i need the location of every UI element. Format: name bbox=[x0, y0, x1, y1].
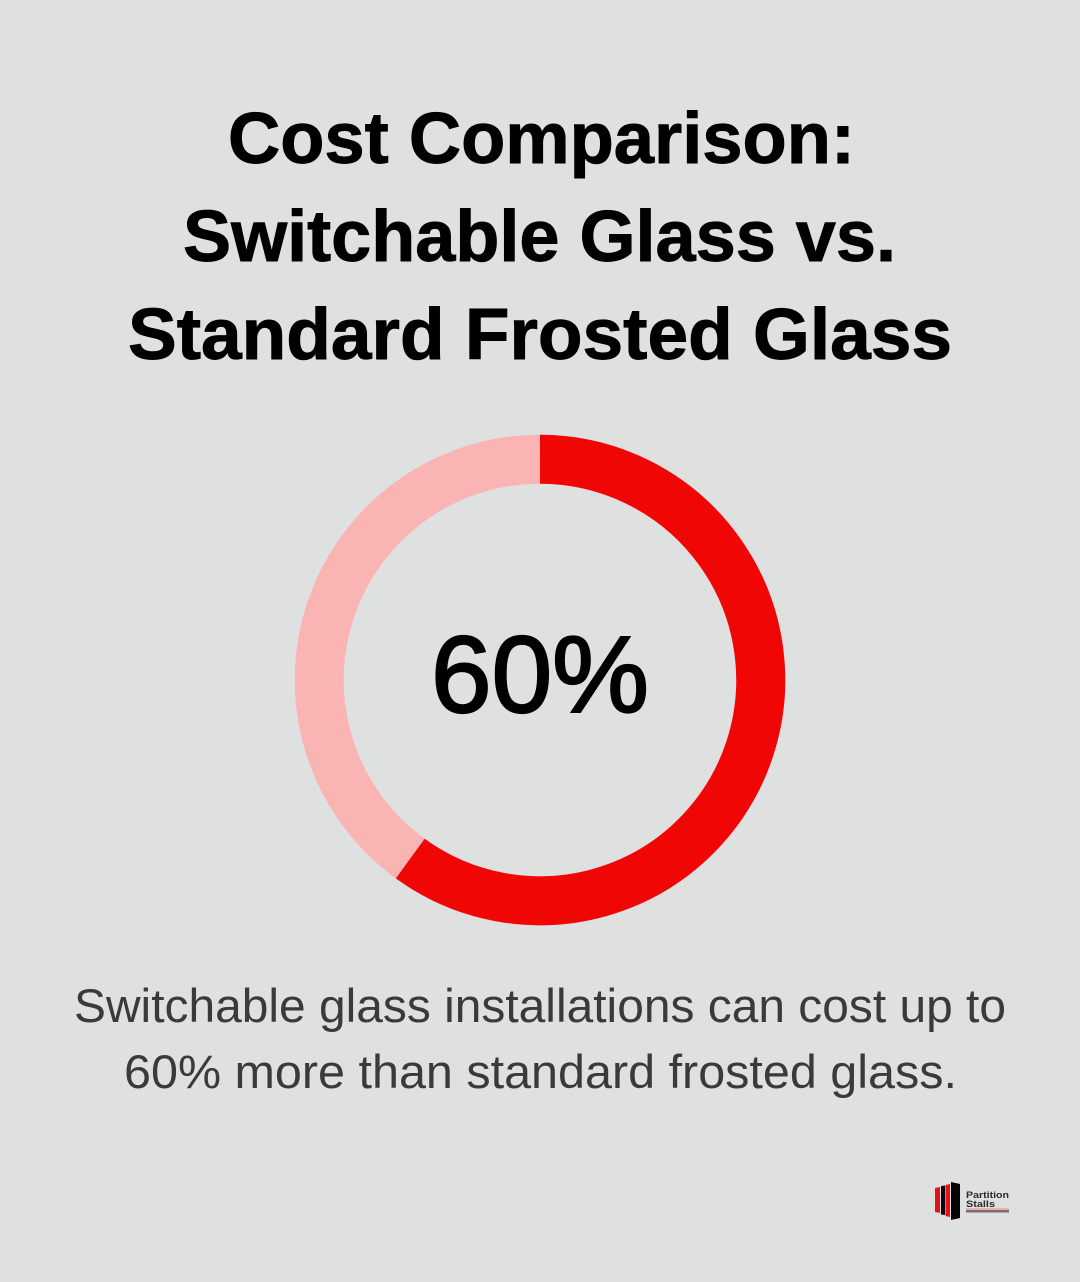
title: Switchable Glass vs. bbox=[183, 197, 896, 277]
logo wordmark: Partition bbox=[966, 1190, 1009, 1201]
logo icon bbox=[935, 1182, 960, 1220]
title: Standard Frosted Glass bbox=[128, 295, 952, 375]
description text: Switchable glass installations can cost up to bbox=[74, 979, 1006, 1032]
description text bbox=[74, 979, 1006, 1098]
title bbox=[128, 99, 952, 375]
title: Cost Comparison: bbox=[228, 99, 855, 179]
donut value arc bbox=[410, 459, 761, 901]
donut chart: 60% bbox=[319, 459, 761, 901]
donut track bbox=[319, 459, 761, 901]
logo: Partition Stalls bbox=[935, 1182, 1009, 1220]
logo wordmark: Stalls bbox=[966, 1199, 995, 1210]
logo tagline bar bbox=[966, 1208, 1009, 1212]
description text: 60% more than standard frosted glass. bbox=[124, 1045, 957, 1098]
donut center value: 60% bbox=[431, 614, 649, 736]
logo wordmark bbox=[966, 1190, 1009, 1210]
